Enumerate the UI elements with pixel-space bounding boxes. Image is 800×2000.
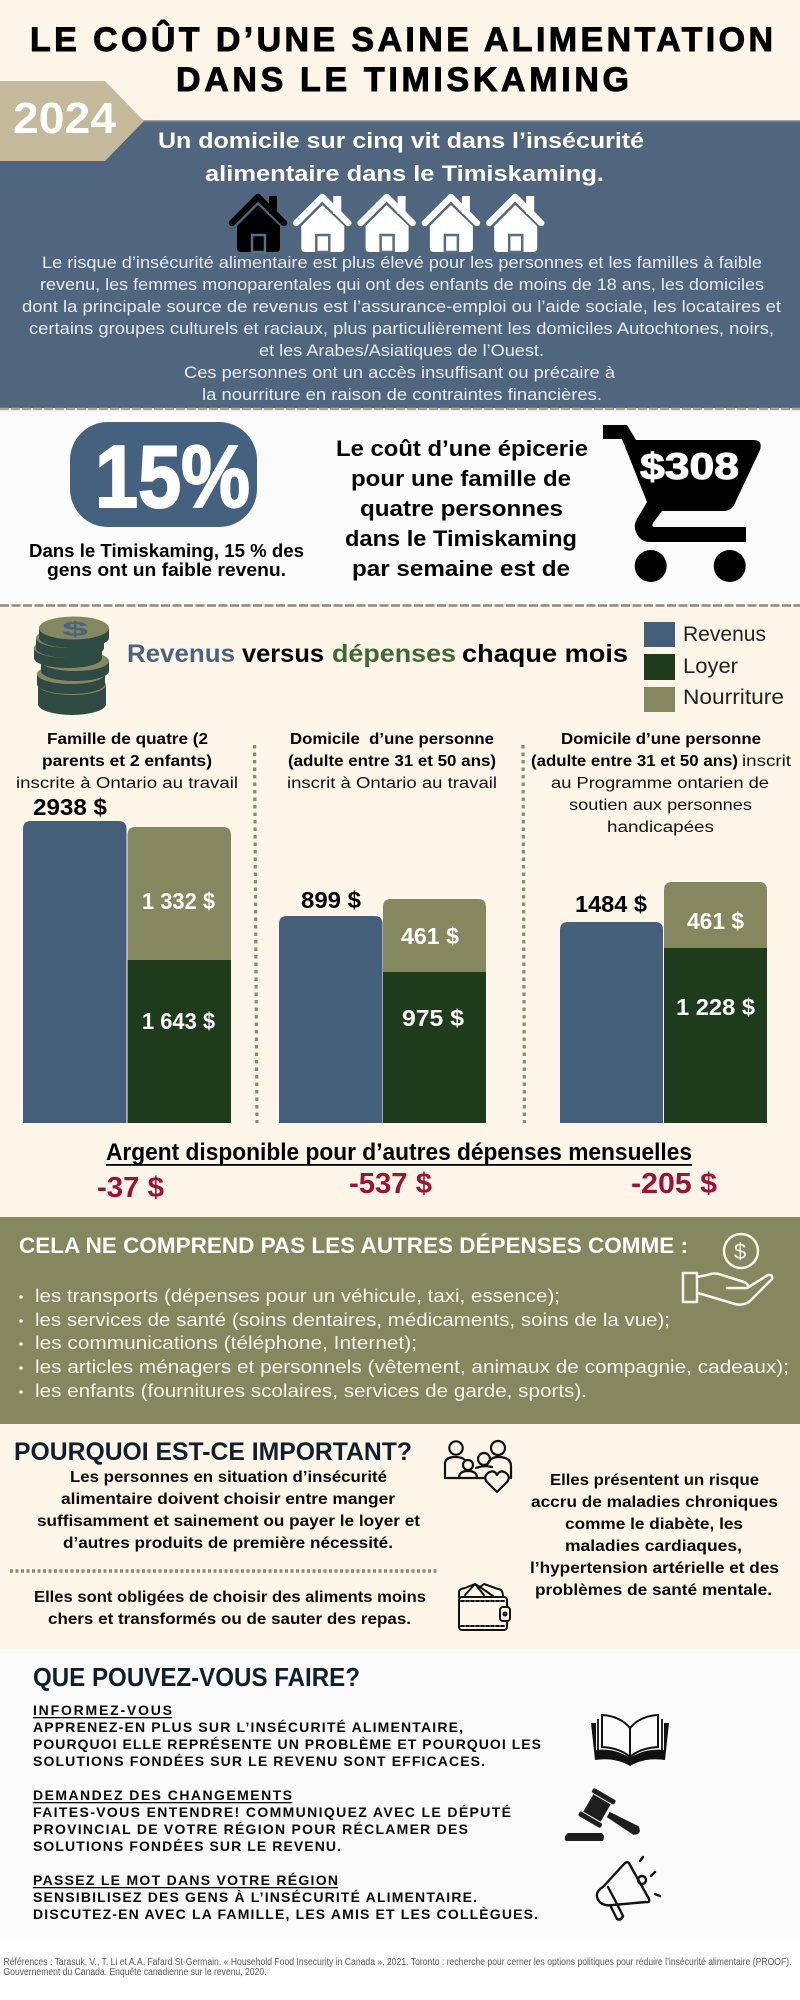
icon: coin stack [34,616,109,715]
icon: gavel [565,1788,647,1846]
caption: low income [29,541,304,580]
text block: health risks: problèmes de santé mentale. [535,1582,772,1599]
text block: choosing between food and rent: suffisamment et sainement ou payer le loyer et [37,1513,421,1530]
year badge: 2024 [13,94,117,143]
text block: health risks: comme le diabète, les [565,1516,743,1533]
action: get informed: APPRENEZ-EN PLUS SUR L’INSÉCURITÉ ALIMENTAIRE, [33,1719,463,1735]
panel: header [0,0,800,120]
icon: megaphone [597,1857,660,1920]
text block: cheaper processed food [34,1589,426,1628]
panel: why it matters [0,1424,800,1649]
column heading: family of four: inscrite à Ontario au travail [16,775,238,792]
text block: risk groups: Le risque d’insécurité alimentaire est plus élevé pour les personnes et les familles à faible [42,253,762,272]
heading: income versus expenses: dépenses [332,640,456,668]
action: spread the word: PASSEZ LE MOT DANS VOTRE RÉGION [33,1872,338,1888]
text block: grocery cost: dans le Timiskaming [345,526,577,551]
references [4,1957,792,1978]
bar chart: family of four: 1 643 $ [142,1008,215,1034]
references: Gouvernement du Canada. Enquête canadienne sur le revenu, 2020. [4,1967,266,1978]
text block: grocery cost: Le coût d’une épicerie [336,436,588,461]
bar chart: family of four [23,794,231,1123]
heading: income versus expenses: chaque mois [462,640,628,668]
action: spread the word [33,1872,538,1922]
text block: choosing between food and rent: Les personnes en situation d’insécurité [70,1469,387,1486]
column heading: single person working: Domicile d’une personne [290,731,494,748]
panel: what you can do [0,1649,800,1937]
text block: choosing between food and rent: d’autres produits de première nécessité. [63,1535,393,1552]
legend: Loyer [683,655,738,678]
list: other expenses: les articles ménagers et personnels (vêtement, animaux de compagnie, cadeaux); [35,1356,789,1377]
column heading: single person on disability support: au Programme ontarien de [551,775,769,792]
icon: five houses, one in black [232,196,541,252]
title [30,20,773,99]
text block: health risks: l’hypertension artérielle et des [530,1560,779,1577]
icon: shopping cart with $308: $308 [640,446,739,487]
value: family of four balance: -37 $ [97,1172,164,1204]
column heading: single person on disability support: soutien aux personnes [569,797,752,814]
text block: health risks: maladies cardiaques, [565,1538,742,1555]
value: disability support balance: -205 $ [631,1168,717,1200]
column heading: single person on disability support: inscrit [742,753,792,770]
column heading: single person working: inscrit à Ontario au travail [287,775,497,792]
action: demand change: FAITES-VOUS ENTENDRE! COMMUNIQUEZ AVEC LE DÉPUTÉ [33,1804,511,1820]
legend [644,622,784,712]
caption: low income: gens ont un faible revenu. [47,560,286,580]
icon: hand holding a coin: $ [734,1239,746,1264]
column heading: single person working: (adulte entre 31 et 50 ans) [288,753,496,770]
heading: income versus expenses: Revenus [127,640,235,668]
bar chart: single person working [279,887,486,1123]
text block: risk groups: certains groupes culturels et raciaux, plus particulièrement les domiciles Autochtones, noirs, [29,319,774,338]
panel: other expenses [0,1217,800,1424]
panel: key figures [0,408,800,606]
text block: grocery cost: quatre personnes [360,496,563,521]
heading: income versus expenses: versus [242,640,324,668]
action: get informed: SOLUTIONS FONDÉES SUR LE REVENU SONT EFFICACES. [33,1753,485,1769]
action: demand change: PROVINCIAL DE VOTRE RÉGION POUR RÉCLAMER DES [33,1821,468,1837]
subheading [158,128,644,186]
heading: income versus expenses [127,640,628,668]
text block: health risks [530,1472,779,1599]
text block: risk groups: revenu, les femmes monoparentales qui ont des enfants de moins de 18 ans, les domiciles [40,275,764,294]
action: demand change: SOLUTIONS FONDÉES SUR LE REVENU. [33,1838,341,1854]
column heading: single person on disability support: Domicile d’une personne [561,731,761,748]
text block: grocery cost: pour une famille de [351,466,571,491]
action: spread the word: DISCUTEZ-EN AVEC LA FAMILLE, LES AMIS ET LES COLLÈGUES. [33,1906,538,1922]
bar chart: single person on disability support: 1 228 $ [676,994,755,1020]
bar chart: family of four: 2938 $ [33,794,107,820]
action: spread the word: SENSIBILISEZ DES GENS À L’INSÉCURITÉ ALIMENTAIRE. [33,1889,477,1905]
action: demand change [33,1787,511,1854]
text block: risk groups [22,253,781,404]
title: DANS LE TIMISKAMING [176,61,629,99]
text block: risk groups: la nourriture en raison de contraintes financières. [202,385,602,404]
text block: risk groups: Ces personnes ont un accès insuffisant ou précaire à [184,363,616,382]
bar chart: single person working: 975 $ [402,1005,464,1031]
bar chart: single person on disability support [560,882,767,1123]
list: other expenses: les services de santé (soins dentaires, médicaments, soins de la vue); [35,1309,670,1330]
subheading: alimentaire dans le Timiskaming. [205,161,604,186]
text block: choosing between food and rent: alimentaire doivent choisir entre manger [61,1491,395,1508]
text block: risk groups: et les Arabes/Asiatiques de l’Ouest. [259,341,544,360]
bar chart: family of four: 1 332 $ [142,888,215,914]
heading: other expenses: CELA NE COMPREND PAS LES AUTRES DÉPENSES COMME : [19,1233,688,1258]
icon: shopping cart with $308 [603,425,761,582]
value: single working balance: -537 $ [349,1168,432,1200]
year badge [0,81,144,161]
text block: health risks: Elles présentent un risque [550,1472,759,1489]
text block: health risks: accru de maladies chroniques [531,1494,778,1511]
legend: Revenus [683,623,766,646]
heading: why it matters: POURQUOI EST-CE IMPORTANT? [14,1438,412,1466]
bar chart: single person on disability support: 1484 $ [575,891,647,917]
action: get informed: POURQUOI ELLE REPRÉSENTE UN PROBLÈME ET POURQUOI LES [33,1736,541,1752]
list: other expenses: les transports (dépenses pour un véhicule, taxi, essence); [35,1285,560,1306]
text block: grocery cost: par semaine est de [352,556,570,581]
caption: low income: Dans le Timiskaming, 15 % des [29,541,304,561]
subheading: Un domicile sur cinq vit dans l’insécurité [158,128,644,153]
column heading: family of four: parents et 2 enfants) [42,753,212,770]
column heading: single person on disability support: (adulte entre 31 et 50 ans) [531,753,738,770]
bar chart: single person working: 899 $ [301,887,361,913]
action: get informed: INFORMEZ-VOUS [33,1702,172,1718]
icon: family with heart [445,1441,511,1492]
text block: choosing between food and rent [37,1469,421,1552]
heading: money left over: Argent disponible pour d’autres dépenses mensuelles [106,1139,692,1166]
text block: risk groups: dont la principale source de revenus est l’assurance-emploi ou l’aide sociale, les locataires et [22,297,781,316]
stat badge: 15%: 15% [95,427,250,526]
text block: grocery cost [336,436,588,581]
bar chart: single person working: 461 $ [401,923,459,949]
column heading: single person on disability support [531,731,792,836]
icon: open book [591,1715,669,1766]
icon: hand holding a coin [683,1234,772,1305]
heading: what you can do: QUE POUVEZ-VOUS FAIRE? [33,1662,360,1692]
list: other expenses [19,1285,789,1401]
column heading: single person on disability support: handicapées [607,819,714,836]
icon: wallet [459,1584,510,1630]
legend: Nourriture [683,686,784,709]
title: LE COÛT D’UNE SAINE ALIMENTATION [30,20,773,59]
icon: coin stack: $ [62,619,88,641]
action: get informed [33,1702,541,1769]
text block: cheaper processed food: Elles sont obligées de choisir des aliments moins [34,1589,426,1606]
list: other expenses: les communications (téléphone, Internet); [35,1332,417,1353]
action: demand change: DEMANDEZ DES CHANGEMENTS [33,1787,292,1803]
text block: cheaper processed food: chers et transformés ou de sauter des repas. [48,1611,411,1628]
column heading: single person working [287,731,497,792]
bar chart: single person on disability support: 461 $ [687,908,744,934]
column heading: family of four [16,731,238,792]
panel: income versus expenses [0,606,800,1218]
list: other expenses: les enfants (fournitures scolaires, services de garde, sports). [35,1380,587,1401]
panel: food insecurity [0,81,800,408]
column heading: family of four: Famille de quatre (2 [47,731,208,748]
